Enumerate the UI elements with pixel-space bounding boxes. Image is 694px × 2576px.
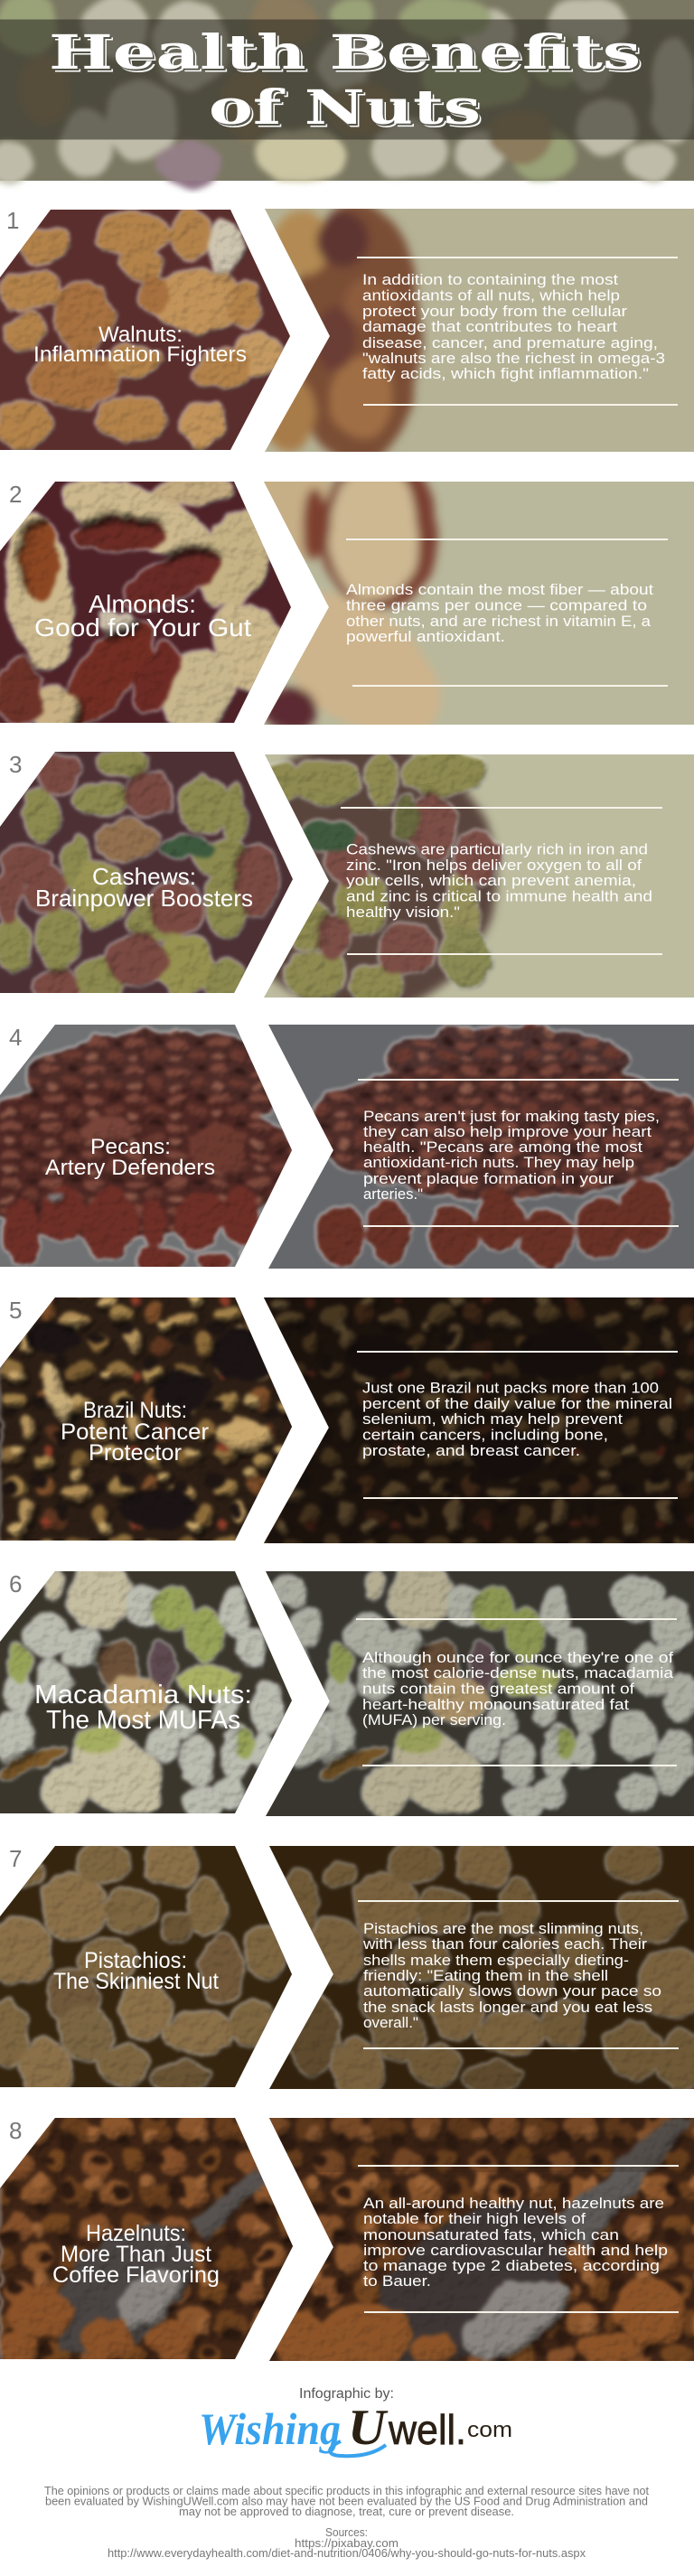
header photo — [0, 0, 694, 188]
pistachios description — [362, 1921, 661, 2031]
hazelnuts description: notable for their high levels of — [363, 2211, 586, 2227]
brazil nuts description: certain cancers, including bone, — [362, 1428, 608, 1444]
panel: 7 pistachios — [0, 1834, 694, 2100]
number 8: 8 — [9, 2117, 22, 2144]
walnuts description: damage that contributes to heart — [362, 319, 617, 335]
panel: 1 walnuts — [0, 203, 694, 465]
pecans description: Pecans aren't just for making tasty pies, — [363, 1109, 660, 1125]
pecans photo right — [267, 1025, 694, 1270]
walnuts description: antioxidants of all nuts, which help — [362, 287, 620, 304]
number 6: 6 — [9, 1570, 22, 1597]
almonds description — [346, 582, 653, 645]
panel: 4 pecans — [0, 1024, 694, 1275]
brazil nuts description: Just one Brazil nut packs more than 100 — [362, 1381, 659, 1397]
pistachios divider lines — [358, 1901, 679, 2048]
pecans heading — [45, 1135, 215, 1180]
walnuts description: In addition to containing the most — [362, 272, 618, 288]
cashews description: and zinc is critical to immune health and — [346, 889, 652, 905]
logo: WishingUwell.com: com — [467, 2418, 512, 2442]
pecans photo left — [0, 1025, 298, 1275]
hazelnuts description — [363, 2196, 668, 2290]
cashews description: zinc. "Iron helps deliver oxygen to all of — [346, 857, 642, 874]
panel: 6 macadamia nuts — [0, 1571, 694, 1816]
macadamia photo right — [266, 1571, 694, 1816]
almonds description: three grams per ounce — compared to — [346, 598, 647, 614]
pecans description: arteries." — [363, 1186, 423, 1203]
disclaimer: The opinions or products or claims made about specific products in this infographic and external resource sites have not — [44, 2484, 649, 2497]
brazil nuts heading: Brazil Nuts: — [83, 1398, 187, 1423]
cashews heading: Cashews: — [92, 863, 196, 890]
pecans heading: Artery Defenders — [45, 1156, 215, 1180]
header banner — [0, 0, 694, 188]
number 4: 4 — [9, 1024, 22, 1051]
walnuts description: "walnuts are also the richest in omega-3 — [362, 351, 665, 367]
title: Health Benefits — [49, 25, 641, 80]
pistachios description: with less than four calories each. Their — [362, 1936, 648, 1953]
pecans heading: Pecans: — [90, 1135, 171, 1159]
pistachios description: friendly: "Eating them in the shell — [363, 1968, 608, 1984]
cashews description: your cells, which can prevent anemia, — [346, 873, 636, 889]
pistachios heading: Pistachios: — [84, 1948, 187, 1973]
almonds heading — [34, 590, 251, 642]
macadamia description: nuts contain the greatest amount of — [362, 1681, 634, 1697]
hazelnuts description: improve cardiovascular health and help — [363, 2243, 668, 2259]
title — [49, 25, 641, 136]
disclaimer: may not be approved to diagnose, treat, cure or prevent disease. — [179, 2505, 514, 2518]
cashews photo right — [264, 754, 694, 998]
title: of Nuts — [209, 80, 481, 136]
almonds photo left — [0, 482, 291, 723]
sources: http://www.everydayhealth.com/diet-and-nutrition/0406/why-you-should-go-nuts-for-nuts.aspx — [108, 2546, 586, 2560]
hazelnuts photo left — [0, 2109, 307, 2381]
almonds divider lines — [346, 539, 668, 686]
pistachios description: shells make them especially dieting- — [363, 1953, 629, 1969]
number 1: 1 — [6, 207, 19, 234]
cashews description: Cashews are particularly rich in iron and — [346, 842, 648, 858]
pecans description: antioxidant-rich nuts. They may help — [363, 1155, 634, 1171]
pistachios heading — [53, 1948, 219, 1994]
walnuts heading: Walnuts: — [98, 323, 183, 347]
brazil nuts description: percent of the daily value for the mineral — [362, 1396, 672, 1412]
logo: WishingUwell.com: Wishing — [199, 2403, 341, 2454]
panel: 5 brazil nuts — [0, 1288, 694, 1550]
brazil nuts description: prostate, and breast cancer. — [362, 1443, 580, 1459]
almonds description: Almonds contain the most fiber — about — [346, 582, 653, 598]
pecans description: health. "Pecans are among the most — [363, 1139, 642, 1156]
sources — [108, 2525, 586, 2560]
sources: Sources: — [325, 2525, 368, 2539]
pistachios photo left — [0, 1846, 292, 2087]
pistachios description: the snack lasts longer and you eat less — [363, 2000, 652, 2016]
hazelnuts heading: Coffee Flavoring — [52, 2262, 220, 2288]
sources: https://pixabay.com — [295, 2536, 399, 2550]
macadamia description: Although ounce for ounce they're one of — [362, 1650, 673, 1666]
logo: WishingUwell.com: U — [348, 2400, 389, 2456]
cashews divider lines — [341, 808, 662, 954]
hazelnuts heading: Hazelnuts: — [86, 2221, 186, 2246]
almonds description: powerful antioxidant. — [346, 629, 505, 645]
cashews description: healthy vision." — [346, 904, 460, 921]
macadamia heading: Macadamia Nuts: — [34, 1681, 252, 1710]
pistachios description: automatically slows down your pace so — [363, 1983, 661, 2000]
macadamia description: (MUFA) per serving. — [362, 1712, 506, 1728]
disclaimer — [44, 2484, 649, 2518]
pecans divider lines — [358, 1080, 679, 1226]
hazelnuts heading: More Than Just — [61, 2242, 211, 2267]
almonds description: other nuts, and are richest in vitamin E, a — [346, 614, 652, 630]
brazil nuts divider lines — [357, 1352, 678, 1498]
hazelnuts photo right — [262, 2109, 694, 2402]
walnuts description: fatty acids, which fight inflammation." — [362, 366, 649, 382]
disclaimer: been evaluated by WishingUWell.com also may have not been evaluated by the US Food and Drug Administration and — [45, 2494, 648, 2508]
walnuts divider lines — [357, 258, 678, 405]
macadamia description: the most calorie-dense nuts, macadamia — [362, 1665, 674, 1681]
pistachios description: overall." — [363, 2015, 418, 2031]
hazelnuts description: An all-around healthy nut, hazelnuts are — [363, 2196, 664, 2212]
macadamia description: heart-healthy monounsaturated fat — [362, 1697, 629, 1713]
hazelnuts description: to Bauer. — [363, 2273, 431, 2290]
macadamia heading: The Most MUFAs — [46, 1706, 240, 1735]
hazelnuts divider lines — [358, 2166, 679, 2312]
walnuts heading: Inflammation Fighters — [33, 342, 247, 367]
panel: 8 hazelnuts — [0, 2109, 694, 2402]
hazelnuts description: monounsaturated fats, which can — [363, 2227, 619, 2243]
number 5: 5 — [9, 1297, 22, 1324]
hazelnuts heading — [52, 2221, 220, 2288]
pecans description: they can also help improve your heart — [363, 1124, 652, 1140]
brazil nuts heading: Protector — [89, 1440, 182, 1466]
brazil nuts description — [362, 1381, 672, 1459]
walnuts photo left — [0, 209, 298, 452]
walnuts description — [362, 272, 665, 382]
brazil nuts photo left — [0, 1297, 292, 1541]
macadamia divider lines — [356, 1619, 677, 1766]
logo: WishingUwell.com: well. — [388, 2406, 466, 2453]
cashews heading: Brainpower Boosters — [35, 885, 253, 912]
cashews description — [346, 842, 652, 921]
pecans description — [363, 1109, 660, 1203]
macadamia description — [362, 1650, 674, 1728]
walnuts description: protect your body from the cellular — [362, 304, 628, 320]
pistachios photo right — [267, 1834, 694, 2100]
brazil nuts heading — [61, 1398, 209, 1466]
pistachios heading: The Skinniest Nut — [53, 1969, 219, 1994]
cashews photo left — [0, 749, 298, 1005]
panel: 2 almonds — [0, 482, 694, 725]
header dark band — [0, 20, 694, 139]
panel: 3 cashews — [0, 741, 694, 1012]
pecans description: prevent plaque formation in your — [363, 1171, 614, 1187]
macadamia photo left — [0, 1571, 292, 1813]
logo: WishingUwell.com — [199, 2400, 512, 2456]
brazil nuts heading: Potent Cancer — [61, 1419, 209, 1445]
hazelnuts description: to manage type 2 diabetes, according — [363, 2258, 660, 2274]
number 2: 2 — [9, 481, 22, 508]
walnuts description: disease, cancer, and premature aging, — [362, 335, 658, 351]
brazil nuts description: selenium, which may help prevent — [362, 1411, 623, 1428]
cashews heading — [35, 863, 253, 912]
brazil nuts photo right — [258, 1288, 694, 1550]
footer credit: Infographic by: — [299, 2386, 394, 2402]
walnuts heading — [33, 323, 247, 367]
almonds heading: Good for Your Gut — [34, 614, 251, 642]
number 3: 3 — [9, 751, 22, 778]
almonds photo right — [264, 482, 694, 725]
almonds heading: Almonds: — [89, 590, 196, 618]
pistachios description: Pistachios are the most slimming nuts, — [363, 1921, 643, 1937]
walnuts photo right — [262, 203, 694, 465]
macadamia heading — [34, 1681, 252, 1735]
number 7: 7 — [9, 1845, 22, 1872]
